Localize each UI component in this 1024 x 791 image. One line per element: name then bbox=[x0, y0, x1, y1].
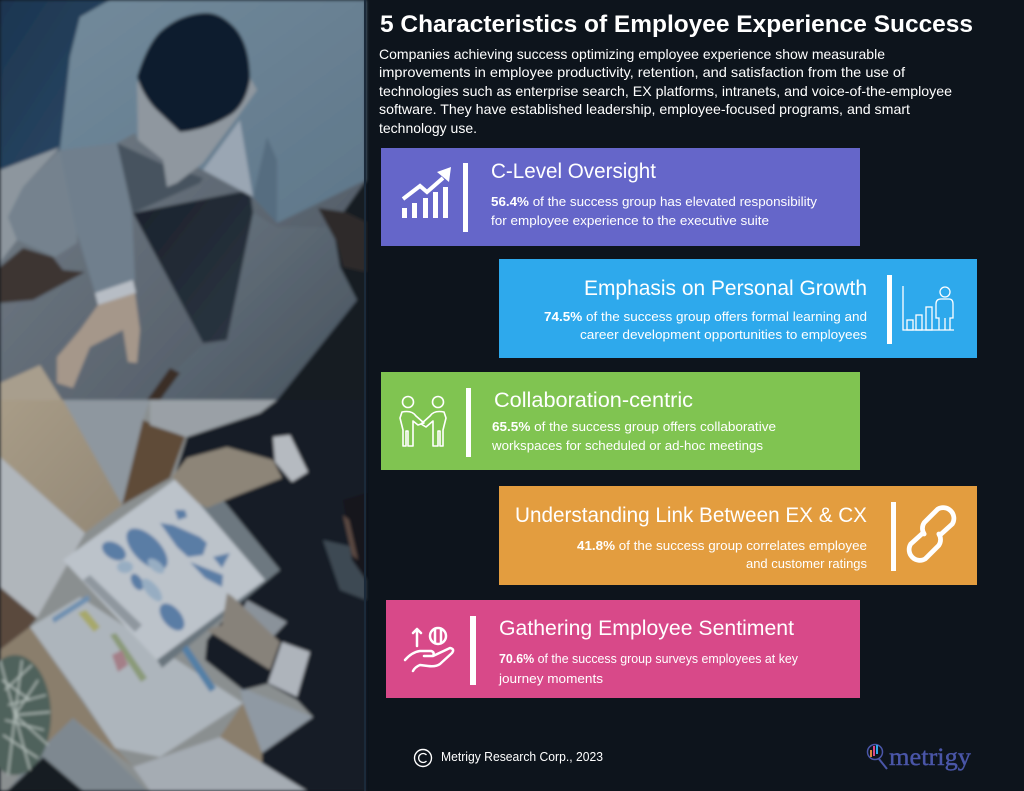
heading: C-Level Oversight: C-Level Oversight bbox=[491, 160, 656, 183]
heading: Collaboration-centric: Collaboration-centric bbox=[494, 389, 693, 412]
panel: Gathering Employee Sentiment bbox=[386, 600, 860, 698]
heading: Emphasis on Personal Growth: Emphasis on Personal Growth bbox=[584, 277, 867, 300]
intro paragraph: software. They have established leadership, employee-focused programs, and smart bbox=[379, 101, 910, 117]
photo right edge shading bbox=[364, 0, 366, 791]
text: growth stat bbox=[544, 310, 867, 342]
text: EX and CX stat: 41.8% of the success group correlates employee bbox=[577, 539, 867, 553]
text: C-level stat: for employee experience to the executive suite bbox=[491, 214, 769, 228]
text: sentiment stat: journey moments bbox=[498, 672, 603, 686]
text: growth stat: career development opportunities to employees bbox=[580, 328, 867, 342]
intro paragraph: Companies achieving success optimizing employee experience show measurable bbox=[379, 46, 885, 62]
intro paragraph: technology use. bbox=[379, 120, 477, 136]
heading: Gathering Employee Sentiment: Gathering Employee Sentiment bbox=[499, 617, 794, 640]
text: sentiment stat bbox=[498, 652, 799, 686]
icon: hand holding coin with arrow bbox=[405, 628, 453, 671]
text: sentiment stat: 70.6% of the success group surveys employees at key bbox=[499, 652, 799, 666]
panel: C-Level Oversight bbox=[381, 148, 860, 246]
icon: chain link bbox=[909, 508, 954, 560]
icon: two people shaking hands bbox=[400, 396, 446, 446]
text: C-level stat bbox=[491, 195, 818, 228]
intro paragraph bbox=[379, 46, 952, 136]
title: 5 Characteristics of Employee Experience Success bbox=[380, 11, 973, 38]
heading: Understanding Link Between EX & CX: Understanding Link Between EX & CX bbox=[515, 504, 867, 527]
footer: copyright: Metrigy Research Corp., 2023 bbox=[441, 750, 603, 764]
text: collaboration stat: 65.5% of the success group offers collaborative bbox=[492, 420, 776, 434]
icon: rising bar chart bbox=[402, 167, 451, 218]
text: EX and CX stat: and customer ratings bbox=[746, 557, 867, 571]
text: EX and CX stat bbox=[577, 539, 867, 571]
text: growth stat: 74.5% of the success group offers formal learning and bbox=[544, 310, 867, 324]
text: C-level stat: 56.4% of the success group has elevated responsibility bbox=[491, 195, 818, 209]
intro paragraph: technologies such as enterprise search, EX platforms, intranets, and voice-of-the-employee bbox=[379, 83, 952, 99]
text: collaboration stat: workspaces for scheduled or ad-hoc meetings bbox=[491, 439, 763, 453]
panel: Collaboration-centric bbox=[381, 372, 860, 470]
footer: copyright bbox=[414, 750, 603, 766]
panel: Understanding Link Between EX & CX bbox=[499, 486, 977, 585]
logo: Metrigy: metrigy bbox=[889, 744, 972, 771]
text: collaboration stat bbox=[491, 420, 776, 453]
icon: person beside bars bbox=[903, 286, 954, 330]
panel: Emphasis on Personal Growth bbox=[499, 259, 977, 358]
photo: business people reviewing charts bbox=[0, 0, 366, 791]
intro paragraph: improvements in employee productivity, retention, and satisfaction from the use of bbox=[379, 64, 905, 80]
